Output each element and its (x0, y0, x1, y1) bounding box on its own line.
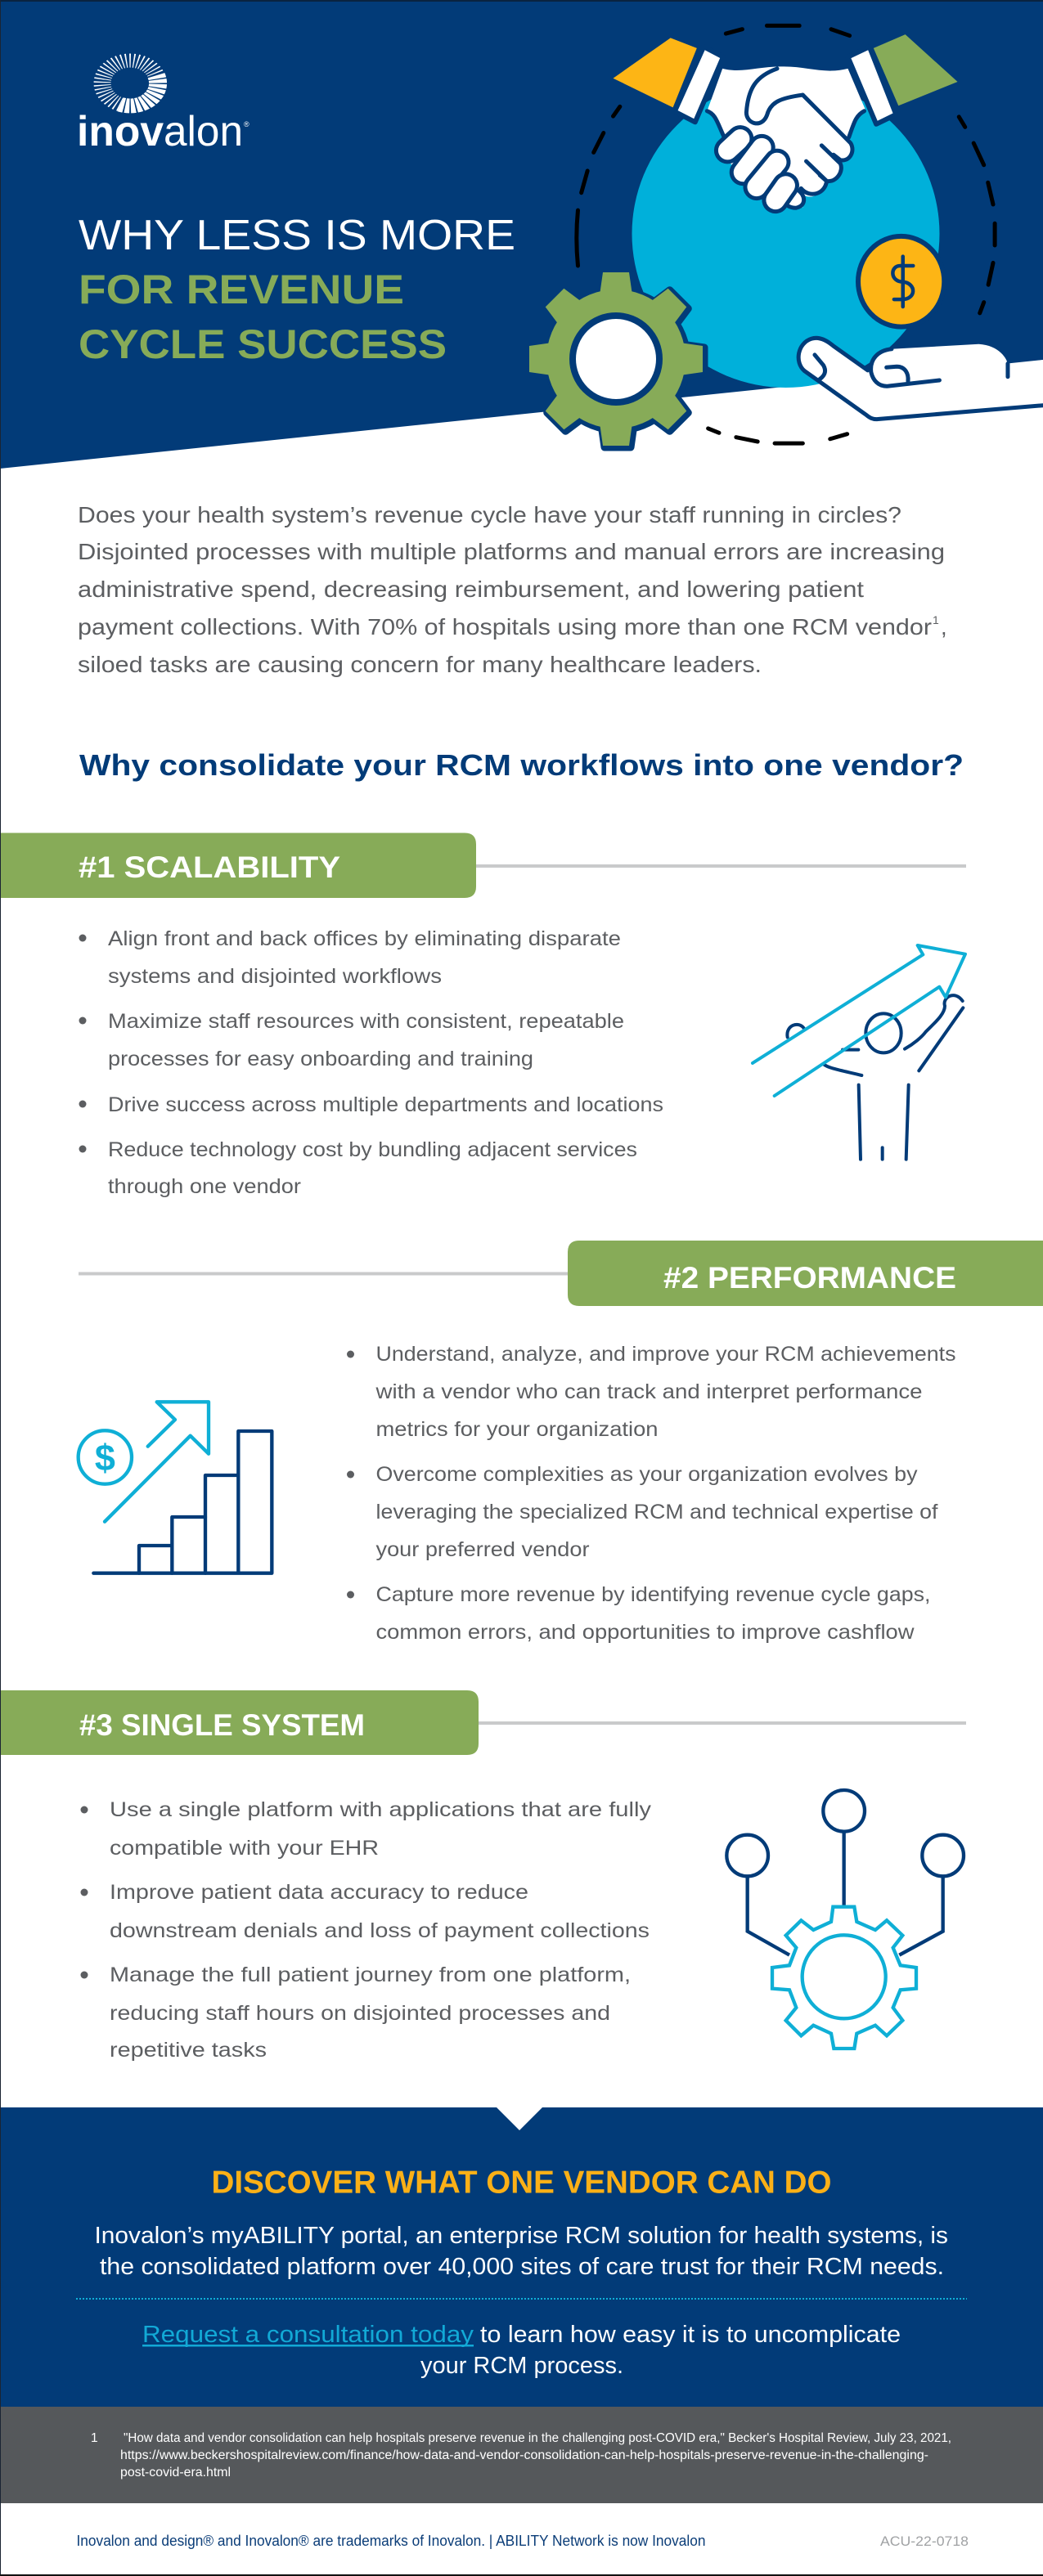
text block: consultation link: your RCM process. (420, 2353, 623, 2379)
text block: intro paragraph: , (941, 614, 947, 640)
icon: person lifting arrow (753, 945, 965, 1160)
bullet list 2: metrics for your organization (376, 1418, 658, 1441)
icon: dollar coin (858, 236, 944, 327)
bullet list 2: Capture more revenue by identifying revenue cycle gaps, (376, 1583, 931, 1606)
heading: discover: DISCOVER WHAT ONE VENDOR CAN DO (211, 2165, 831, 2200)
text block: intro paragraph: Disjointed processes with multiple platforms and manual errors are increasing (78, 539, 945, 564)
text block: intro paragraph: payment collections. With 70% of hospitals using more than one RCM vendor (78, 614, 932, 640)
panel: footnote: 1 (91, 2431, 98, 2445)
bullet list 2: leveraging the specialized RCM and technical expertise of (376, 1501, 938, 1524)
icon: growth bar chart: $ (95, 1437, 115, 1479)
text block: portal description: Inovalon’s myABILITY portal, an enterprise RCM solution for health systems, is (95, 2223, 948, 2249)
bullet list 3: Manage the full patient journey from one platform, (110, 1963, 631, 1986)
bullet list 3: downstream denials and loss of payment collections (110, 1919, 650, 1942)
footer: trademark line: Inovalon and design® and Inovalon® are trademarks of Inovalon. | ABILITY Network is now Inovalon (77, 2533, 705, 2549)
panel: footnote (0, 2407, 1043, 2503)
section bar 3 (0, 1690, 966, 1755)
bullet list 2: with a vendor who can track and interpret performance (375, 1380, 923, 1403)
bullet list 3: Use a single platform with applications that are fully (110, 1798, 652, 1821)
title: FOR REVENUE (79, 267, 404, 312)
icon: handshake (613, 34, 958, 208)
text block: intro paragraph: Does your health system’s revenue cycle have your staff running in circles? (78, 502, 901, 527)
text block: intro paragraph (78, 502, 947, 677)
bullet list 2: common errors, and opportunities to improve cashflow (376, 1621, 915, 1644)
logo wordmark: ® (244, 120, 250, 128)
bullet list 1 (79, 927, 663, 1198)
section bar 3: #3 SINGLE SYSTEM (79, 1708, 365, 1742)
logo wordmark (77, 108, 250, 155)
title: WHY LESS IS MORE (79, 212, 515, 259)
text block: consultation link: to learn how easy it is to uncomplicate (480, 2322, 901, 2348)
panel: footnote: https://www.beckershospitalreview.com/finance/how-data-and-vendor-consolidation-can-help-hospitals-preserve-revenue-in-the-challenging- (120, 2448, 928, 2462)
bullet list 2 (347, 1343, 955, 1644)
bullet list 1: systems and disjointed workflows (108, 965, 442, 988)
logo wordmark: inov (77, 108, 164, 155)
bullet list 1: Reduce technology cost by bundling adjacent services (108, 1138, 637, 1161)
illustration: handshake, coin, gear and hand (529, 25, 1043, 447)
text block: intro paragraph: 1 (933, 613, 939, 626)
panel: footnote: "How data and vendor consolidation can help hospitals preserve revenue in the challenging post-COVID era," Becker's Hospital Review, July 23, 2021, (124, 2431, 951, 2445)
panel: section 2 performance (79, 1241, 1043, 1644)
panel: section 3 single system (0, 1690, 966, 2062)
section bar 1: #1 SCALABILITY (79, 850, 340, 884)
section bar 2: #2 PERFORMANCE (663, 1261, 956, 1295)
call to action background with notch (0, 2107, 1043, 2407)
section bar 2 (79, 1241, 1043, 1306)
title: CYCLE SUCCESS (79, 321, 447, 367)
text block: portal description: the consolidated platform over 40,000 sites of care trust for their RCM needs. (100, 2254, 944, 2280)
bullet list 2: Overcome complexities as your organization evolves by (376, 1463, 918, 1486)
text block: intro paragraph: siloed tasks are causing concern for many healthcare leaders. (78, 652, 762, 677)
panel: header background (0, 0, 1043, 469)
bullet list 3: compatible with your EHR (110, 1837, 379, 1860)
bullet list 3: repetitive tasks (110, 2039, 267, 2062)
section bar 1 (0, 832, 966, 898)
logo wordmark: alon (164, 108, 243, 155)
panel: footnote: post-covid-era.html (120, 2466, 231, 2480)
text block: portal description (95, 2223, 948, 2280)
icon: blue circle (632, 80, 939, 388)
icon: open hand (798, 338, 1043, 420)
bullet list 2: your preferred vendor (376, 1538, 589, 1561)
bullet list 3 (80, 1798, 652, 2062)
bullet list 2: Understand, analyze, and improve your RCM achievements (376, 1343, 955, 1366)
title (79, 212, 515, 367)
icon: gear (529, 272, 704, 447)
icon: growth bar chart (79, 1402, 272, 1573)
icon: logo ring (102, 61, 158, 105)
bullet list 1: through one vendor (108, 1175, 301, 1198)
text block: consultation link (142, 2322, 901, 2379)
bullet list 1: Maximize staff resources with consistent, repeatable (108, 1010, 624, 1033)
text block: intro paragraph: administrative spend, decreasing reimbursement, and lowering patient (78, 577, 864, 602)
logo: Inovalon (77, 61, 250, 155)
panel: section 1 scalability (0, 832, 966, 1198)
bullet list 1: processes for easy onboarding and training (108, 1048, 533, 1070)
bullet list 1: Drive success across multiple departments and locations (108, 1093, 663, 1116)
text block: consultation link: Request a consultation today (142, 2322, 474, 2348)
icon: dashed ring (577, 25, 995, 443)
panel: call to action (0, 2107, 1043, 2407)
heading: why consolidate: Why consolidate your RCM workflows into one vendor? (79, 748, 964, 782)
bullet list 3: Improve patient data accuracy to reduce (110, 1881, 528, 1904)
bullet list 1: Align front and back offices by eliminating disparate (108, 927, 621, 950)
bullet list 3: reducing staff hours on disjointed processes and (110, 2002, 610, 2025)
icon: gear with nodes (726, 1790, 964, 2049)
footer: trademark line: ACU-22-0718 (880, 2533, 969, 2549)
